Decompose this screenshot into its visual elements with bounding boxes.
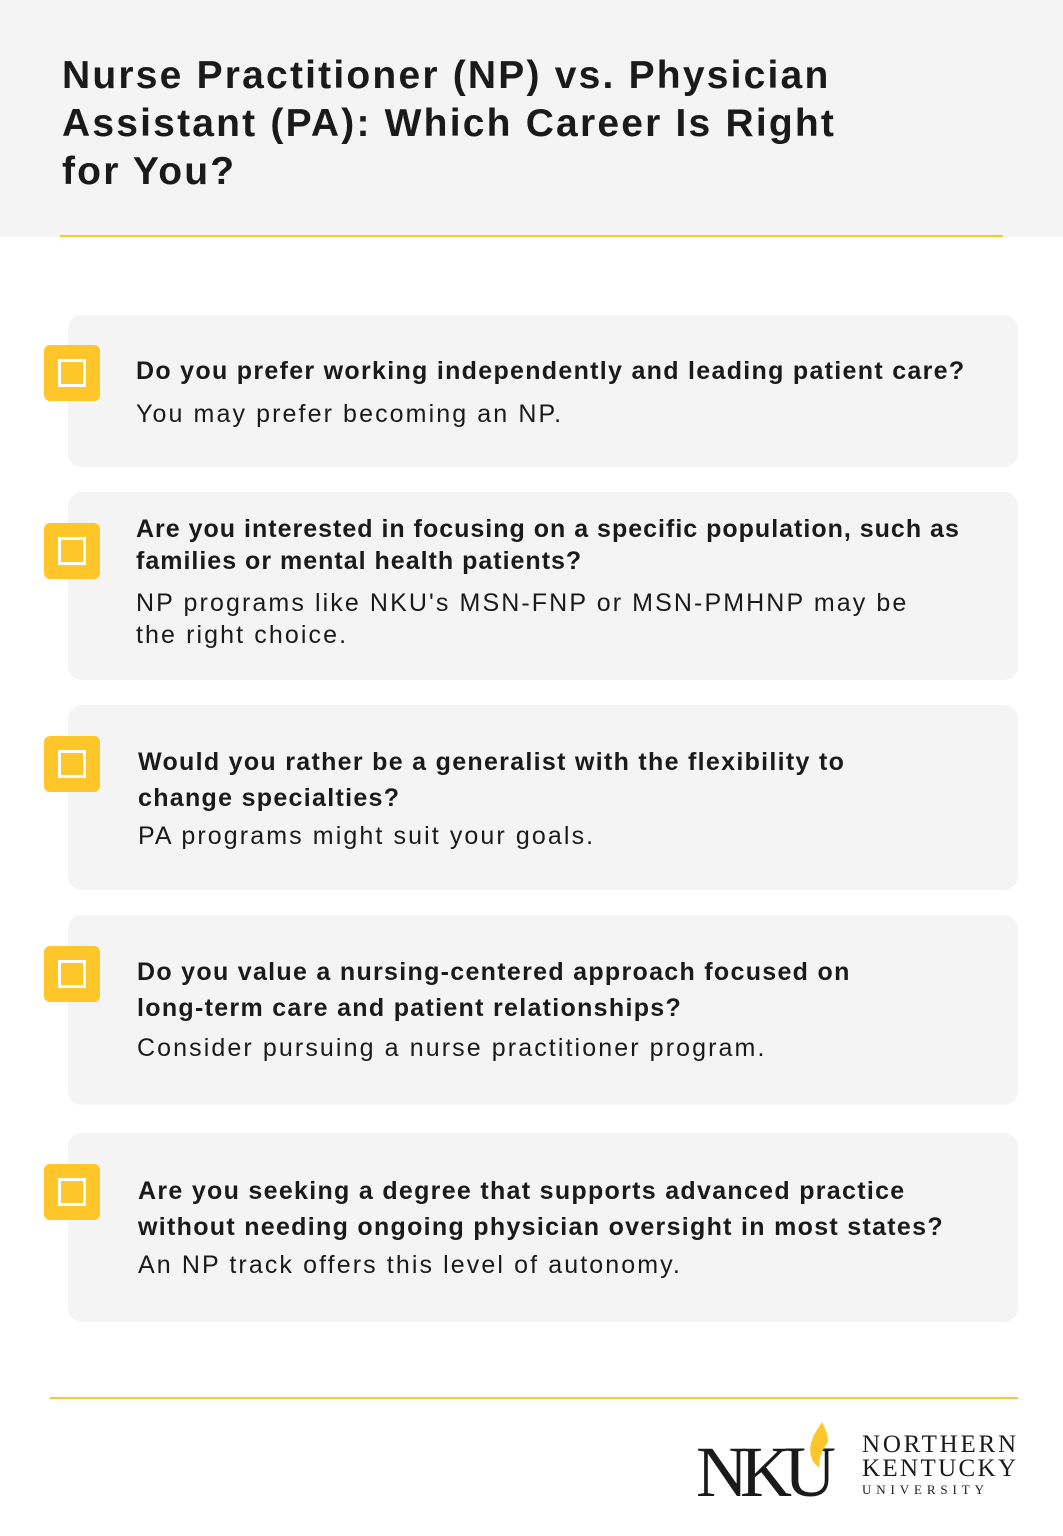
text 3: Would you rather be a generalist with the flexibility to — [138, 748, 845, 776]
text 5 — [138, 1177, 944, 1279]
text 5: An NP track offers this level of autonomy. — [138, 1251, 682, 1279]
logo: NKU: UNIVERSITY — [862, 1482, 985, 1497]
text 1: Do you prefer working independently and leading patient care? — [136, 357, 965, 385]
text 5: without needing ongoing physician oversight in most states? — [138, 1213, 944, 1241]
text 2: NP programs like NKU's MSN-FNP or MSN-PMHNP may be — [136, 589, 908, 617]
icon: checkbox 4 — [44, 946, 100, 1002]
text 1: You may prefer becoming an NP. — [136, 400, 563, 428]
text 3: change specialties? — [138, 784, 400, 812]
logo: NKU: KENTUCKY — [862, 1455, 1016, 1482]
text 1 — [136, 357, 965, 428]
text 4: Do you value a nursing-centered approach focused on — [137, 958, 851, 986]
card 2 — [68, 492, 1018, 680]
card 4 — [68, 915, 1018, 1105]
title: Assistant (PA): Which Career Is Right — [62, 102, 836, 145]
logo: NKU: NORTHERN — [862, 1431, 1016, 1458]
icon: checkbox 5 — [44, 1164, 100, 1220]
logo: NKU — [696, 1422, 1016, 1500]
icon: checkbox 1 — [44, 345, 100, 401]
icon: checkbox 2 — [44, 523, 100, 579]
title: for You? — [62, 150, 236, 193]
text 2: Are you interested in focusing on a specific population, such as — [136, 515, 960, 543]
text 2 — [136, 515, 960, 649]
icon: checkbox 3 — [44, 736, 100, 792]
header band — [0, 0, 1063, 237]
text 3 — [138, 748, 845, 850]
card 3 — [68, 705, 1018, 890]
title — [62, 54, 836, 193]
text 2: the right choice. — [136, 621, 348, 649]
text 4: long-term care and patient relationships? — [137, 994, 682, 1022]
text 3: PA programs might suit your goals. — [138, 822, 595, 850]
title: Nurse Practitioner (NP) vs. Physician — [62, 54, 830, 97]
card 5 — [68, 1133, 1018, 1322]
text 5: Are you seeking a degree that supports advanced practice — [138, 1177, 905, 1205]
text 4: Consider pursuing a nurse practitioner program. — [137, 1034, 767, 1062]
text 4 — [137, 958, 851, 1062]
text 2: families or mental health patients? — [136, 547, 582, 575]
card 1 — [68, 315, 1018, 467]
